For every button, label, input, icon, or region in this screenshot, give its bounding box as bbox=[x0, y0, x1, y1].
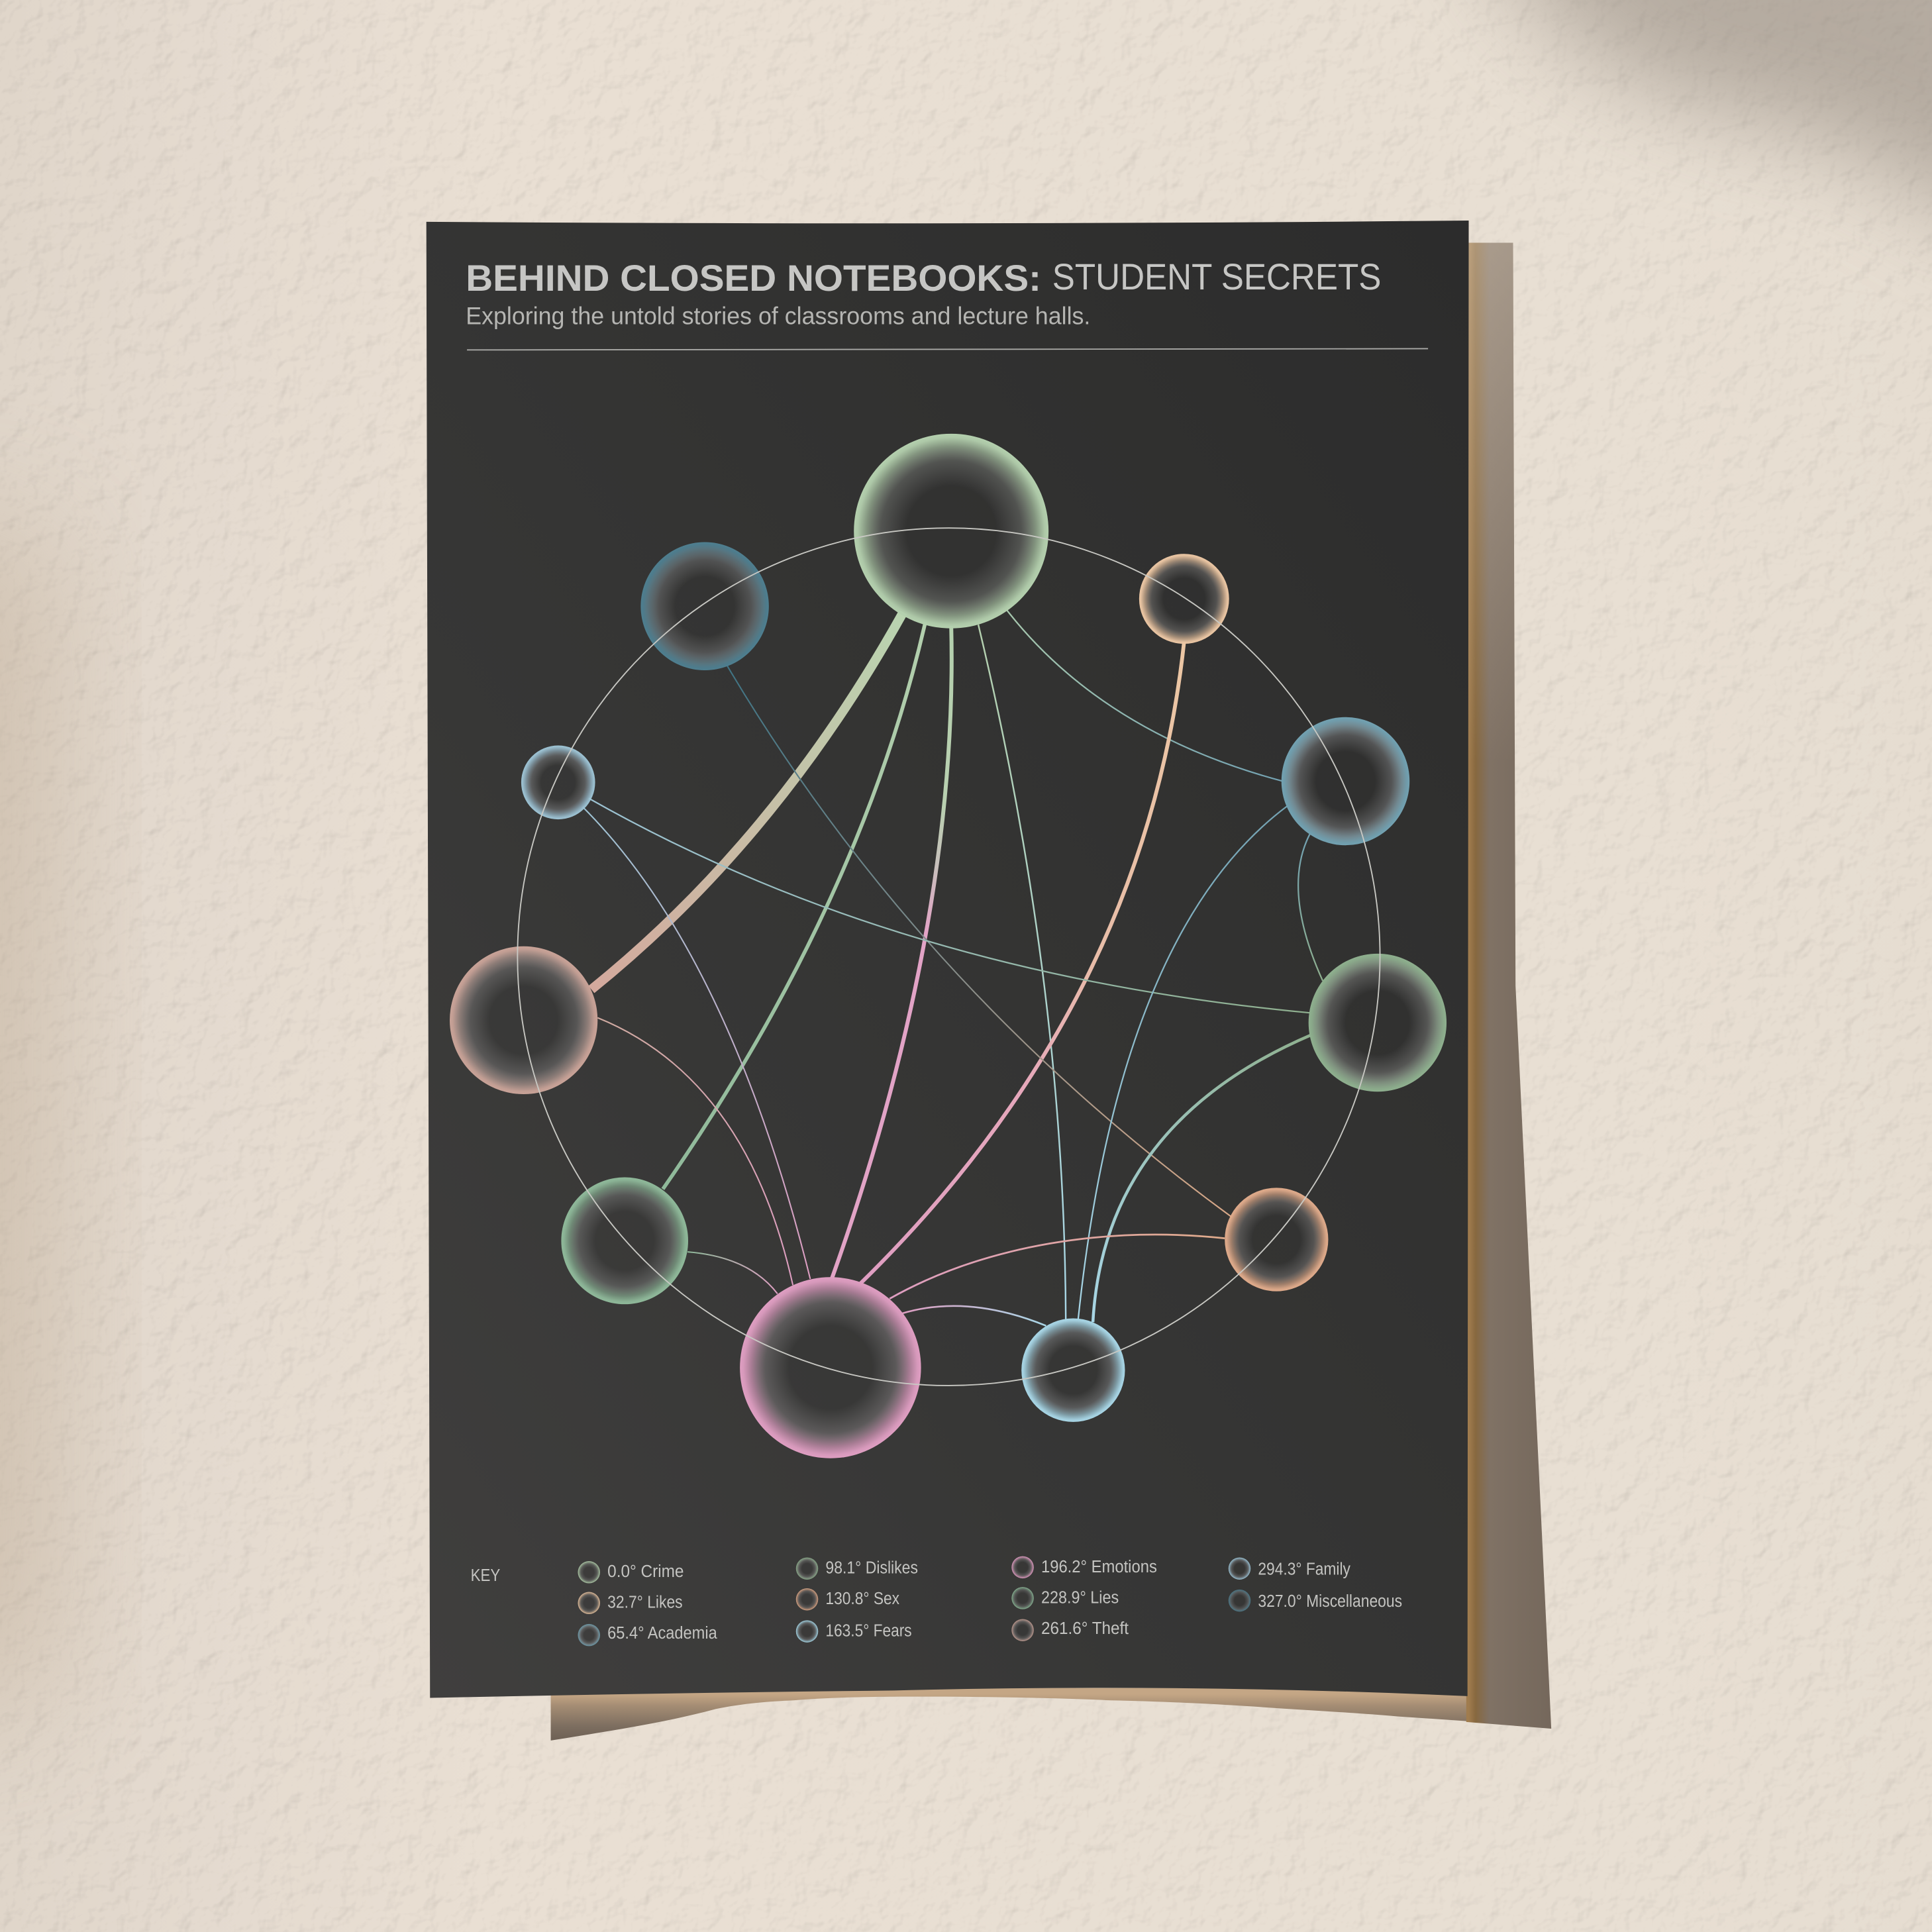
node: Miscellaneous bbox=[640, 542, 769, 670]
link: Lies to Emotions bbox=[687, 1252, 778, 1294]
key item: Likes: 32.7° Likes bbox=[607, 1592, 683, 1612]
key item: Family bbox=[1229, 1557, 1350, 1580]
key item: Academia: 65.4° Academia bbox=[607, 1623, 717, 1643]
link: Family to Dislikes bbox=[589, 798, 1310, 1013]
key item: Crime bbox=[578, 1561, 684, 1584]
cast shadow: upper fade bbox=[1466, 242, 1515, 764]
link: Miscellaneous to Sex bbox=[727, 666, 1232, 1217]
key item: Fears bbox=[796, 1620, 912, 1643]
link: Academia to Dislikes bbox=[1298, 834, 1323, 981]
key item: Emotions: 196.2° Emotions bbox=[1041, 1556, 1157, 1576]
link: Emotions to Fears bbox=[902, 1306, 1046, 1326]
title: BEHIND CLOSED NOTEBOOKS: bbox=[466, 257, 1041, 299]
key item: Theft: 261.6° Theft bbox=[1041, 1618, 1129, 1638]
node: Dislikes bbox=[1309, 954, 1447, 1092]
node: Academia bbox=[1282, 717, 1409, 845]
shadow: left edge bbox=[0, 530, 49, 1700]
key item: Crime: 0.0° Crime bbox=[607, 1561, 684, 1581]
cast shadow: right edge bbox=[1466, 242, 1551, 1729]
shadow: top right foliage bbox=[1466, 0, 1932, 246]
key item: Lies: 228.9° Lies bbox=[1041, 1587, 1119, 1607]
poster cast shadow bbox=[551, 242, 1551, 1741]
key item: Dislikes bbox=[796, 1557, 918, 1580]
key item: Likes bbox=[578, 1592, 683, 1614]
key bbox=[471, 1556, 1402, 1646]
link: Crime to Theft bbox=[591, 613, 903, 990]
link: Academia to Fears bbox=[1078, 806, 1288, 1319]
node: Sex bbox=[1225, 1188, 1328, 1292]
header divider bbox=[467, 348, 1428, 350]
node: Theft bbox=[450, 946, 597, 1094]
key item: Dislikes: 98.1° Dislikes bbox=[825, 1558, 918, 1578]
title bbox=[466, 256, 1381, 299]
key item: Miscellaneous: 327.0° Miscellaneous bbox=[1258, 1591, 1402, 1611]
node: Lies bbox=[561, 1178, 688, 1304]
link: Theft to Emotions bbox=[597, 1018, 793, 1285]
key item: Emotions bbox=[1011, 1556, 1157, 1578]
node: Family bbox=[521, 746, 595, 819]
link: Family to Emotions bbox=[583, 807, 810, 1279]
link: Crime to Academia bbox=[1007, 610, 1283, 781]
cast shadow: bottom edge bbox=[551, 1688, 1478, 1741]
key heading: KEY bbox=[471, 1565, 500, 1585]
link: Likes to Emotions bbox=[860, 642, 1184, 1284]
orbit ring bbox=[517, 528, 1380, 1386]
key item: Miscellaneous bbox=[1229, 1590, 1402, 1611]
node: Emotions bbox=[740, 1277, 921, 1458]
key item: Sex: 130.8° Sex bbox=[825, 1588, 899, 1608]
link: Sex to Emotions bbox=[890, 1235, 1225, 1299]
title: STUDENT SECRETS bbox=[1052, 256, 1381, 297]
link: Crime to Fears bbox=[978, 625, 1066, 1321]
subtitle: Exploring the untold stories of classrooms and lecture halls. bbox=[466, 301, 1090, 329]
key item: Family: 294.3° Family bbox=[1258, 1559, 1350, 1579]
key item: Academia bbox=[578, 1623, 717, 1646]
poster bbox=[427, 221, 1469, 1698]
key item: Theft bbox=[1011, 1618, 1129, 1641]
node: Likes bbox=[1139, 554, 1229, 644]
key item: Sex bbox=[796, 1588, 899, 1610]
link: Dislikes to Fears bbox=[1093, 1035, 1311, 1322]
network links bbox=[583, 610, 1323, 1326]
key item: Fears: 163.5° Fears bbox=[825, 1621, 912, 1641]
link: Crime to Emotions bbox=[832, 626, 952, 1279]
node: Fears bbox=[1021, 1319, 1125, 1422]
link: Crime to Lies bbox=[663, 622, 925, 1189]
key item: Lies bbox=[1011, 1587, 1119, 1609]
node: Crime bbox=[854, 434, 1048, 629]
